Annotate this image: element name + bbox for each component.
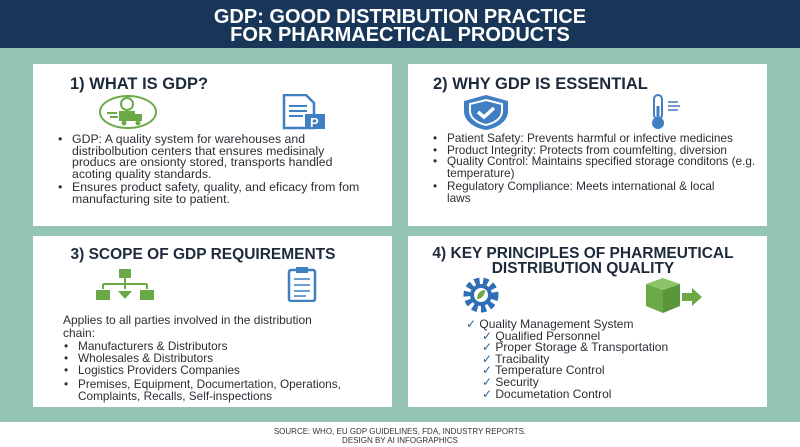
bullets 1: GDP: A quality system for warehouses and distribolbution centers that ensures medisinaly producs are onsionty stored, transports handled acoting quality standards.	[72, 132, 332, 180]
icon: thermometer	[652, 94, 680, 129]
heading 3: 3) SCOPE OF GDP REQUIREMENTS	[70, 246, 335, 263]
bullets 2: Patient Safety: Prevents harmful or infective medicines	[447, 131, 733, 145]
text scope: Applies to all parties involved in the distribution chain:	[63, 313, 312, 340]
heading 2: 2) WHY GDP IS ESSENTIAL	[433, 75, 648, 93]
footer: DESIGN BY AI INFOGRAPHICS	[342, 436, 458, 445]
icon: gear leaf	[464, 278, 498, 312]
bullets 3: Premises, Equipment, Documertation, Operations, Complaints, Recalls, Self-inspections	[78, 377, 341, 403]
header: FOR PHARMAECTICAL PRODUCTS	[230, 24, 570, 46]
bullets 3: Wholesales & Distributors	[78, 351, 213, 365]
icon: document P	[282, 94, 325, 130]
bullets 3: Logistics Providers Companies	[78, 363, 240, 377]
checklist: Temperature Control	[495, 363, 605, 377]
heading 4: DISTRIBUTION QUALITY	[492, 260, 674, 277]
heading 4	[432, 245, 734, 277]
panel: what is GDP	[33, 64, 392, 226]
panel: key principles	[408, 236, 767, 407]
icon: document P: P	[310, 115, 319, 130]
checklist: Proper Storage & Transportation	[495, 340, 668, 354]
checklist: Qualified Personnel	[495, 329, 600, 343]
bullets 2: Product Integrity: Protects from coumfelting, diversion	[447, 142, 727, 156]
checklist: Quality Management System	[479, 317, 633, 331]
bullets 2	[434, 131, 755, 204]
footer	[0, 422, 800, 447]
icon: truck globe	[99, 95, 157, 129]
bullets 1: Ensures product safety, quality, and eficacy from fom manufacturing site to patient.	[72, 180, 359, 206]
bullets 1	[58, 132, 359, 206]
checklist: Documetation Control	[495, 387, 611, 401]
icon: shield	[464, 95, 508, 130]
panel: why essential	[408, 64, 767, 226]
footer: SOURCE: WHO, EU GDP GUIDELINES, FDA, INDUSTRY REPORTS.	[274, 427, 526, 436]
bullets 3: Manufacturers & Distributors	[78, 339, 227, 353]
panel: scope	[33, 236, 392, 407]
checklist: Security	[495, 375, 539, 389]
header: GDP: GOOD DISTRIBUTION PRACTICE	[214, 6, 586, 28]
icon: box arrow	[646, 278, 702, 313]
bullets 2: Quality Control: Maintains specified storage conditons (e.g. temperature)	[447, 154, 755, 180]
heading 4: 4) KEY PRINCIPLES OF PHARMEUTICAL	[432, 245, 734, 262]
heading 1: 1) WHAT IS GDP?	[70, 75, 208, 93]
icon: clipboard	[288, 267, 316, 302]
checklist: Tracibality	[495, 352, 549, 366]
bullets 2: Regulatory Compliance: Meets international & local laws	[447, 179, 715, 204]
bullets 3	[64, 339, 341, 403]
header	[0, 0, 800, 48]
checklist	[468, 317, 668, 401]
icon: org chart	[96, 269, 154, 300]
